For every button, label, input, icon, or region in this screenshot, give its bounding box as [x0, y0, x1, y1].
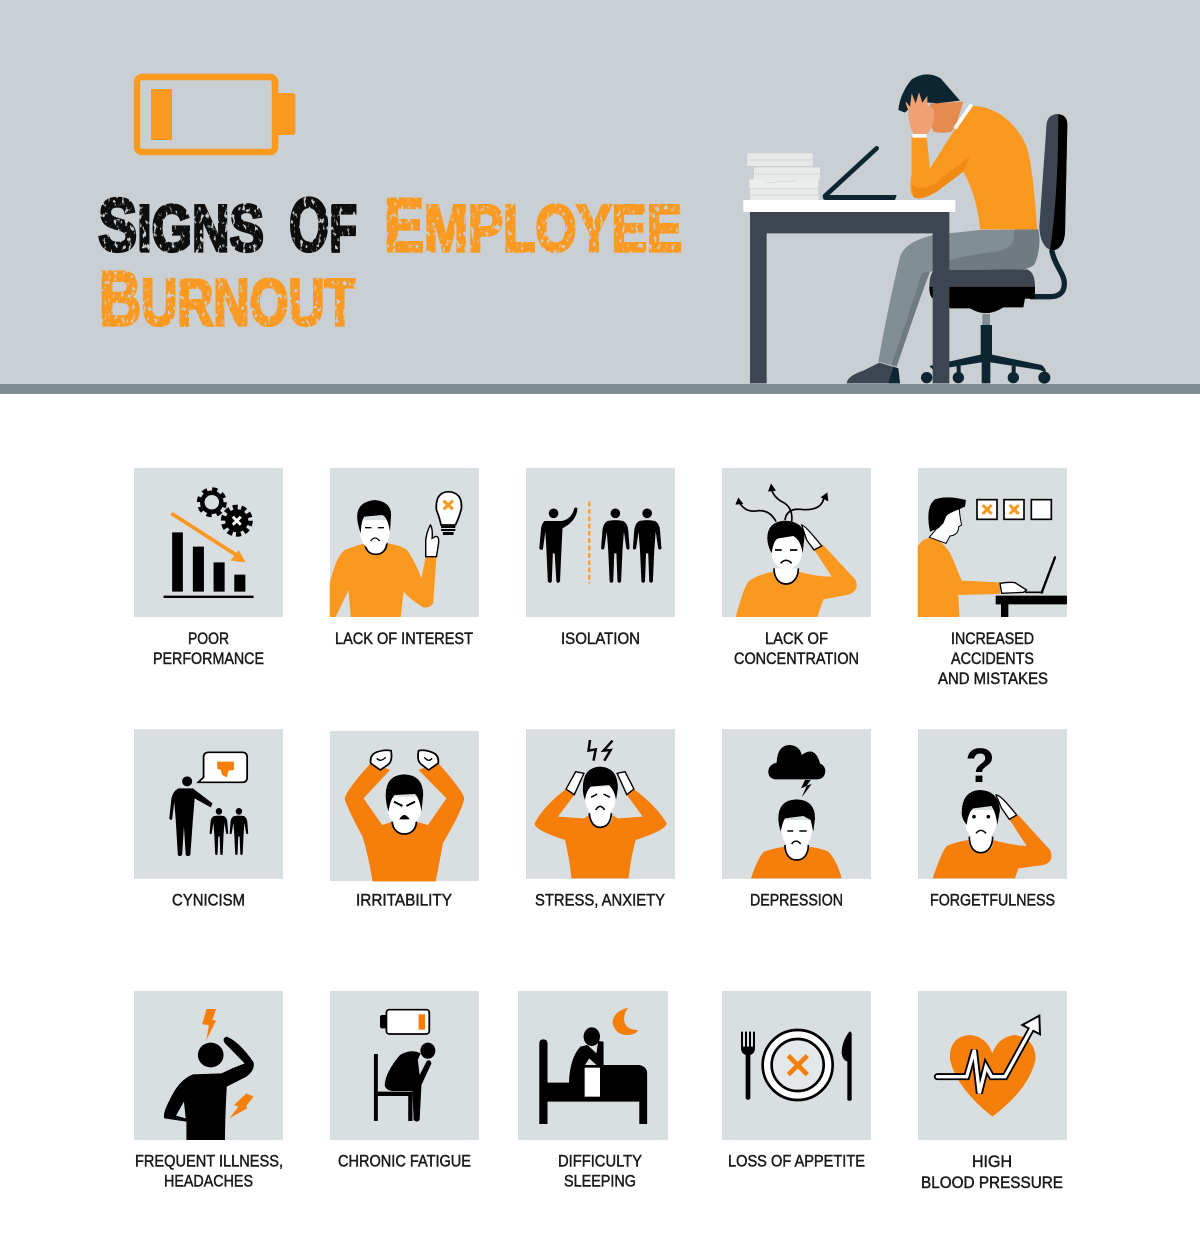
- label: frequent illness, headaches: [135, 1152, 283, 1191]
- label: high blood pressure: BLOOD PRESSURE: [921, 1173, 1063, 1192]
- label: stress, anxiety: STRESS, ANXIETY: [535, 890, 665, 910]
- label: frequent illness, headaches: HEADACHES: [164, 1172, 253, 1191]
- label: increased accidents and mistakes: ACCIDENTS: [951, 649, 1034, 668]
- icon: man holding head with lightning: [535, 740, 667, 878]
- label: depression: DEPRESSION: [750, 890, 843, 910]
- icon: person criticising two others: [169, 752, 248, 856]
- chair: [921, 114, 1067, 384]
- title: BURNOUT: [99, 256, 355, 342]
- label: isolation: ISOLATION: [561, 629, 640, 648]
- label: chronic fatigue: CHRONIC FATIGUE: [338, 1152, 471, 1171]
- label: difficulty sleeping: [558, 1152, 642, 1191]
- label: lack of concentration: CONCENTRATION: [734, 649, 859, 668]
- icon: angry man with raised fists: [345, 750, 464, 881]
- label: frequent illness, headaches: FREQUENT ILLNESS,: [135, 1152, 283, 1171]
- panel: poor performance: [134, 468, 283, 668]
- icon: low battery: [137, 77, 296, 152]
- man upper body: [898, 74, 1037, 229]
- panel: chronic fatigue: [330, 991, 479, 1171]
- title: [98, 183, 682, 342]
- icon: man with scattered arrows: [735, 483, 857, 617]
- icon: declining bars and gears: [164, 490, 254, 598]
- title: OF: [289, 183, 357, 267]
- desk and laptop: [743, 148, 955, 383]
- pants and shoe: [847, 229, 1039, 383]
- label: lack of concentration: [734, 629, 859, 668]
- label: difficulty sleeping: DIFFICULTY: [558, 1152, 642, 1171]
- panel: stress, anxiety: [526, 729, 675, 910]
- icon: confused man with question mark: ?: [965, 739, 995, 793]
- panel: lack of concentration: [722, 468, 871, 668]
- header background: [0, 0, 1200, 384]
- label: cynicism: CYNICISM: [172, 890, 245, 910]
- label: poor performance: POOR: [188, 629, 229, 648]
- label: poor performance: PERFORMANCE: [153, 649, 264, 668]
- title: SIGNS: [98, 183, 264, 267]
- panel: increased accidents and mistakes: [918, 468, 1067, 688]
- icon: confused man with question mark: [933, 739, 1051, 878]
- panel: loss of appetite: [722, 991, 871, 1171]
- panel: frequent illness, headaches: [134, 991, 283, 1191]
- illustration: burnt out worker at desk: [743, 74, 1067, 384]
- panel: isolation: [526, 468, 675, 648]
- floor band: [0, 384, 1200, 394]
- title: EMPLOYEE: [384, 183, 682, 267]
- icon: separated people: [539, 502, 661, 583]
- panel: difficulty sleeping: [518, 991, 668, 1191]
- label: lack of interest: LACK OF INTEREST: [335, 629, 473, 648]
- label: loss of appetite: LOSS OF APPETITE: [728, 1152, 865, 1171]
- panel: forgetfulness: [918, 729, 1067, 910]
- panel: irritability: [330, 731, 479, 910]
- panel: lack of interest: [330, 468, 479, 648]
- label: high blood pressure: [921, 1152, 1063, 1192]
- label: difficulty sleeping: SLEEPING: [564, 1172, 636, 1191]
- icon: man under storm cloud: [751, 745, 842, 878]
- label: increased accidents and mistakes: [938, 629, 1048, 688]
- icon: slumped person on chair with low battery: [374, 1010, 435, 1122]
- label: lack of concentration: LACK OF: [765, 629, 828, 648]
- label: forgetfulness: FORGETFULNESS: [930, 890, 1055, 910]
- panel: cynicism: [134, 729, 283, 910]
- icon: heart with rising pulse arrow: [937, 1016, 1040, 1117]
- icon: man at laptop with crossed checkboxes: [918, 497, 1067, 617]
- label: poor performance: [153, 629, 264, 668]
- icon: man in pain with lightning bolts: [164, 1009, 254, 1140]
- label: increased accidents and mistakes: INCREASED: [951, 629, 1034, 648]
- label: increased accidents and mistakes: AND MISTAKES: [938, 669, 1048, 688]
- label: irritability: IRRITABILITY: [356, 890, 452, 910]
- icon: person awake in bed with moon: [539, 1008, 647, 1124]
- panel: high blood pressure: [918, 991, 1067, 1192]
- label: high blood pressure: HIGH: [972, 1152, 1012, 1171]
- icon: plate and cutlery with cross: [741, 1030, 852, 1101]
- panel: depression: [722, 729, 871, 910]
- icon: man and broken bulb: [330, 492, 462, 617]
